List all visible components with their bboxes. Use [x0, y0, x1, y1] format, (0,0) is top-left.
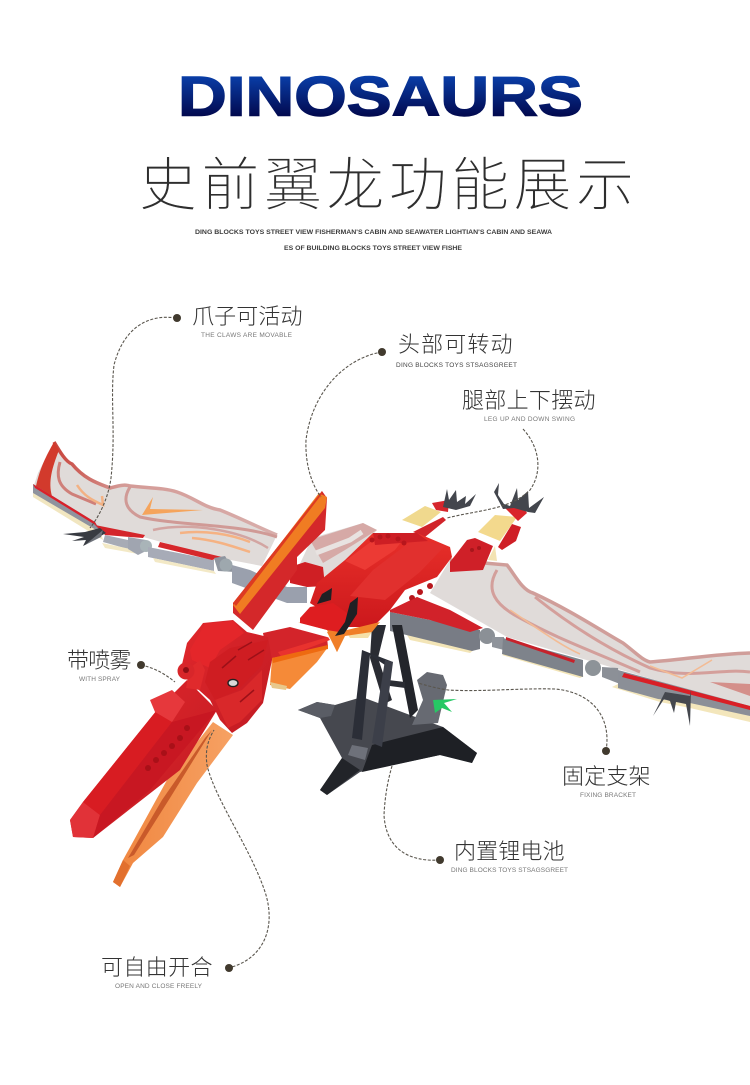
- body: [310, 533, 483, 652]
- label: head: [396, 332, 517, 369]
- illustration: pterosaur model: [33, 442, 750, 887]
- right wing claw: [653, 690, 691, 726]
- connector: leg: [447, 429, 538, 518]
- connector: spray: [137, 661, 175, 682]
- label: open and close: 可自由开合: [101, 955, 213, 980]
- left wing membrane: [33, 442, 277, 566]
- connector: open and close: [206, 730, 269, 972]
- connector: battery: [384, 766, 444, 864]
- title: DINOSAURS: DINOSAURS: [178, 66, 583, 128]
- label: battery: DING BLOCKS TOYS STSAGSGREET: [451, 867, 568, 874]
- label: claws: 爪子可活动: [192, 304, 303, 329]
- subtitle text block: [195, 229, 552, 252]
- heading: Chinese title: 史前翼龙功能展示: [139, 153, 634, 218]
- left wing claw: [63, 528, 106, 546]
- connector: claws: [90, 314, 181, 528]
- label: spray: WITH SPRAY: [79, 676, 121, 683]
- head crest: [233, 491, 327, 630]
- label: spray: 带喷雾: [67, 648, 132, 673]
- lower beak: [113, 722, 233, 887]
- neck: [263, 627, 330, 690]
- connector: fixing bracket: [418, 683, 610, 755]
- shoulder joint: [298, 588, 358, 652]
- label: leg: 腿部上下摆动: [462, 388, 596, 413]
- label: battery: 内置锂电池: [454, 839, 565, 864]
- hind legs: [402, 483, 544, 572]
- stand: [298, 625, 477, 795]
- label: open and close: OPEN AND CLOSE FREELY: [115, 983, 203, 990]
- label: fixing bracket: FIXING BRACKET: [580, 792, 636, 799]
- right wing membrane: [298, 523, 750, 708]
- label: fixing bracket: 固定支架: [562, 764, 651, 789]
- label: battery: [451, 839, 568, 874]
- connector: head: [306, 348, 386, 497]
- label: leg: LEG UP AND DOWN SWING: [484, 416, 575, 423]
- label: claws: THE CLAWS ARE MOVABLE: [201, 332, 293, 339]
- label: head: 头部可转动: [398, 332, 513, 357]
- label: head: DING BLOCKS TOYS STSAGSGREET: [396, 362, 517, 369]
- subtitle text block: ES OF BUILDING BLOCKS TOYS STREET VIEW FISHE: [284, 245, 463, 252]
- upper beak: [70, 680, 217, 838]
- right wing arm: [390, 597, 750, 722]
- left wing arm: [33, 484, 325, 603]
- subtitle text block: DING BLOCKS TOYS STREET VIEW FISHERMAN'S CABIN AND SEAWATER LIGHTIAN'S CABIN AND SEAWA: [195, 229, 552, 236]
- head: [178, 620, 272, 733]
